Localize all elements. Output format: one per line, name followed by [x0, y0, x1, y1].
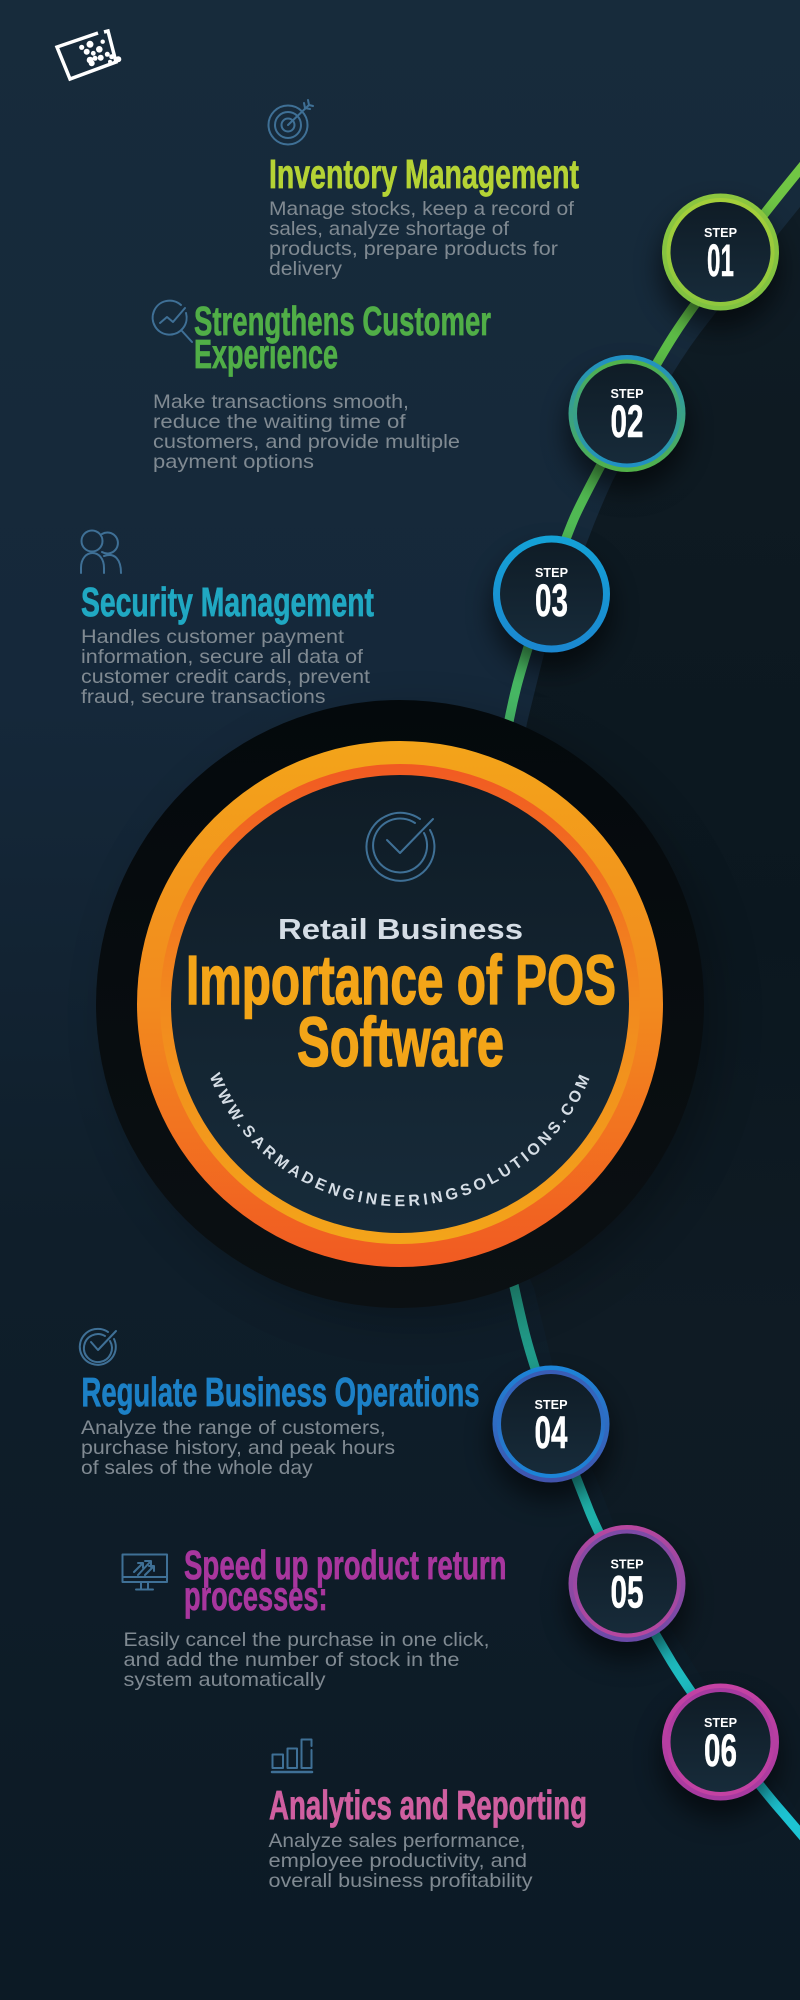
- step 02: STEP: [610, 387, 644, 401]
- description: Security Management: fraud, secure transactions: [81, 686, 326, 708]
- timeline curve: [493, 162, 800, 1840]
- description: Strengthens Customer Experience: customers, and provide multiple: [153, 431, 460, 453]
- heading: Strengthens Customer Experience: [194, 298, 491, 377]
- step 02: 02: [610, 396, 644, 447]
- heading: Strengthens Customer Experience: Strengthens Customer: [194, 298, 491, 344]
- step 03: STEP: [535, 566, 568, 580]
- description: Security Management: [81, 626, 371, 708]
- description: Security Management: customer credit cards, prevent: [81, 666, 371, 688]
- step 05: [567, 1525, 687, 1660]
- step 06: STEP: [704, 1716, 737, 1730]
- item: Security Management: [81, 530, 374, 708]
- description: Analytics and Reporting: overall business profitability: [268, 1870, 533, 1892]
- heading: Speed up product return processes: Speed up product return: [184, 1542, 506, 1588]
- icon: check circle small: [80, 1329, 116, 1365]
- heading: Speed up product return processes: processes:: [184, 1573, 328, 1619]
- description: Strengthens Customer Experience: payment options: [153, 451, 314, 473]
- description: Analytics and Reporting: Analyze sales performance,: [268, 1830, 526, 1852]
- icon: users: [81, 530, 121, 573]
- subtitle: Retail Business: Retail Business: [278, 914, 523, 946]
- description: Speed up product return processes: Easily cancel the purchase in one click,: [124, 1629, 490, 1651]
- description: Inventory Management: products, prepare products for: [269, 238, 559, 260]
- step 03: [492, 536, 612, 670]
- step 03: 03: [535, 575, 568, 626]
- heading: Strengthens Customer Experience: Experience: [194, 331, 338, 377]
- central badge: [96, 700, 704, 1322]
- step 04: STEP: [534, 1398, 568, 1412]
- icon: chart magnifier: [153, 301, 192, 342]
- item: Analytics and Reporting: [268, 1740, 587, 1892]
- logo: [57, 31, 121, 79]
- title: Importance of POS Software: Software: [297, 1003, 504, 1081]
- heading: Analytics and Reporting: Analytics and Reporting: [269, 1782, 587, 1828]
- title: Importance of POS Software: Importance of POS: [186, 941, 616, 1019]
- description: Inventory Management: delivery: [269, 258, 342, 280]
- description: Analytics and Reporting: [268, 1830, 533, 1892]
- description: Regulate Business Operations: Analyze the range of customers,: [81, 1417, 386, 1439]
- step 01: STEP: [704, 226, 737, 240]
- item: Speed up product return processes: [122, 1542, 506, 1691]
- step 06: [660, 1684, 780, 1818]
- step 01: 01: [707, 235, 734, 286]
- description: Analytics and Reporting: employee productivity, and: [268, 1850, 527, 1872]
- icon: check circle: [366, 813, 434, 881]
- heading: Security Management: Security Management: [81, 579, 374, 625]
- heading: Speed up product return processes: [184, 1542, 506, 1619]
- description: Security Management: information, secure all data of: [81, 646, 364, 668]
- icon: target: [268, 100, 313, 144]
- description: Strengthens Customer Experience: reduce the waiting time of: [153, 411, 406, 433]
- step 05: 05: [610, 1566, 644, 1618]
- description: Inventory Management: sales, analyze shortage of: [269, 218, 510, 240]
- step 02: [567, 355, 687, 490]
- description: Regulate Business Operations: purchase history, and peak hours: [81, 1437, 395, 1459]
- title: Importance of POS Software: [186, 941, 616, 1081]
- heading: Regulate Business Operations: Regulate Business Operations: [82, 1369, 480, 1415]
- description: Speed up product return processes: [124, 1629, 490, 1691]
- item: Regulate Business Operations: [80, 1329, 479, 1479]
- item: Strengthens Customer Experience: [153, 298, 491, 473]
- icon: bar chart: [272, 1740, 312, 1772]
- curved website url: WWW.SARMADENGINEERINGSOLUTIONS.COM: [210, 1072, 590, 1206]
- description: Speed up product return processes: and add the number of stock in the: [124, 1649, 460, 1671]
- description: Speed up product return processes: system automatically: [124, 1669, 326, 1691]
- step 04: [491, 1366, 611, 1500]
- heading: Inventory Management: Inventory Management: [269, 151, 579, 197]
- step 06: 06: [704, 1725, 737, 1776]
- item: Inventory Management: [268, 100, 579, 280]
- step 04: 04: [534, 1407, 568, 1458]
- description: Regulate Business Operations: [81, 1417, 395, 1479]
- timeline dark side panel: [516, 207, 800, 1815]
- description: Strengthens Customer Experience: [153, 391, 460, 473]
- step 05: STEP: [610, 1558, 644, 1572]
- description: Inventory Management: [269, 198, 575, 280]
- description: Strengthens Customer Experience: Make transactions smooth,: [153, 391, 409, 413]
- icon: monitor: [122, 1554, 167, 1590]
- description: Inventory Management: Manage stocks, keep a record of: [269, 198, 575, 220]
- description: Security Management: Handles customer payment: [81, 626, 345, 648]
- description: Regulate Business Operations: of sales of the whole day: [81, 1457, 313, 1479]
- step 01: [660, 194, 780, 328]
